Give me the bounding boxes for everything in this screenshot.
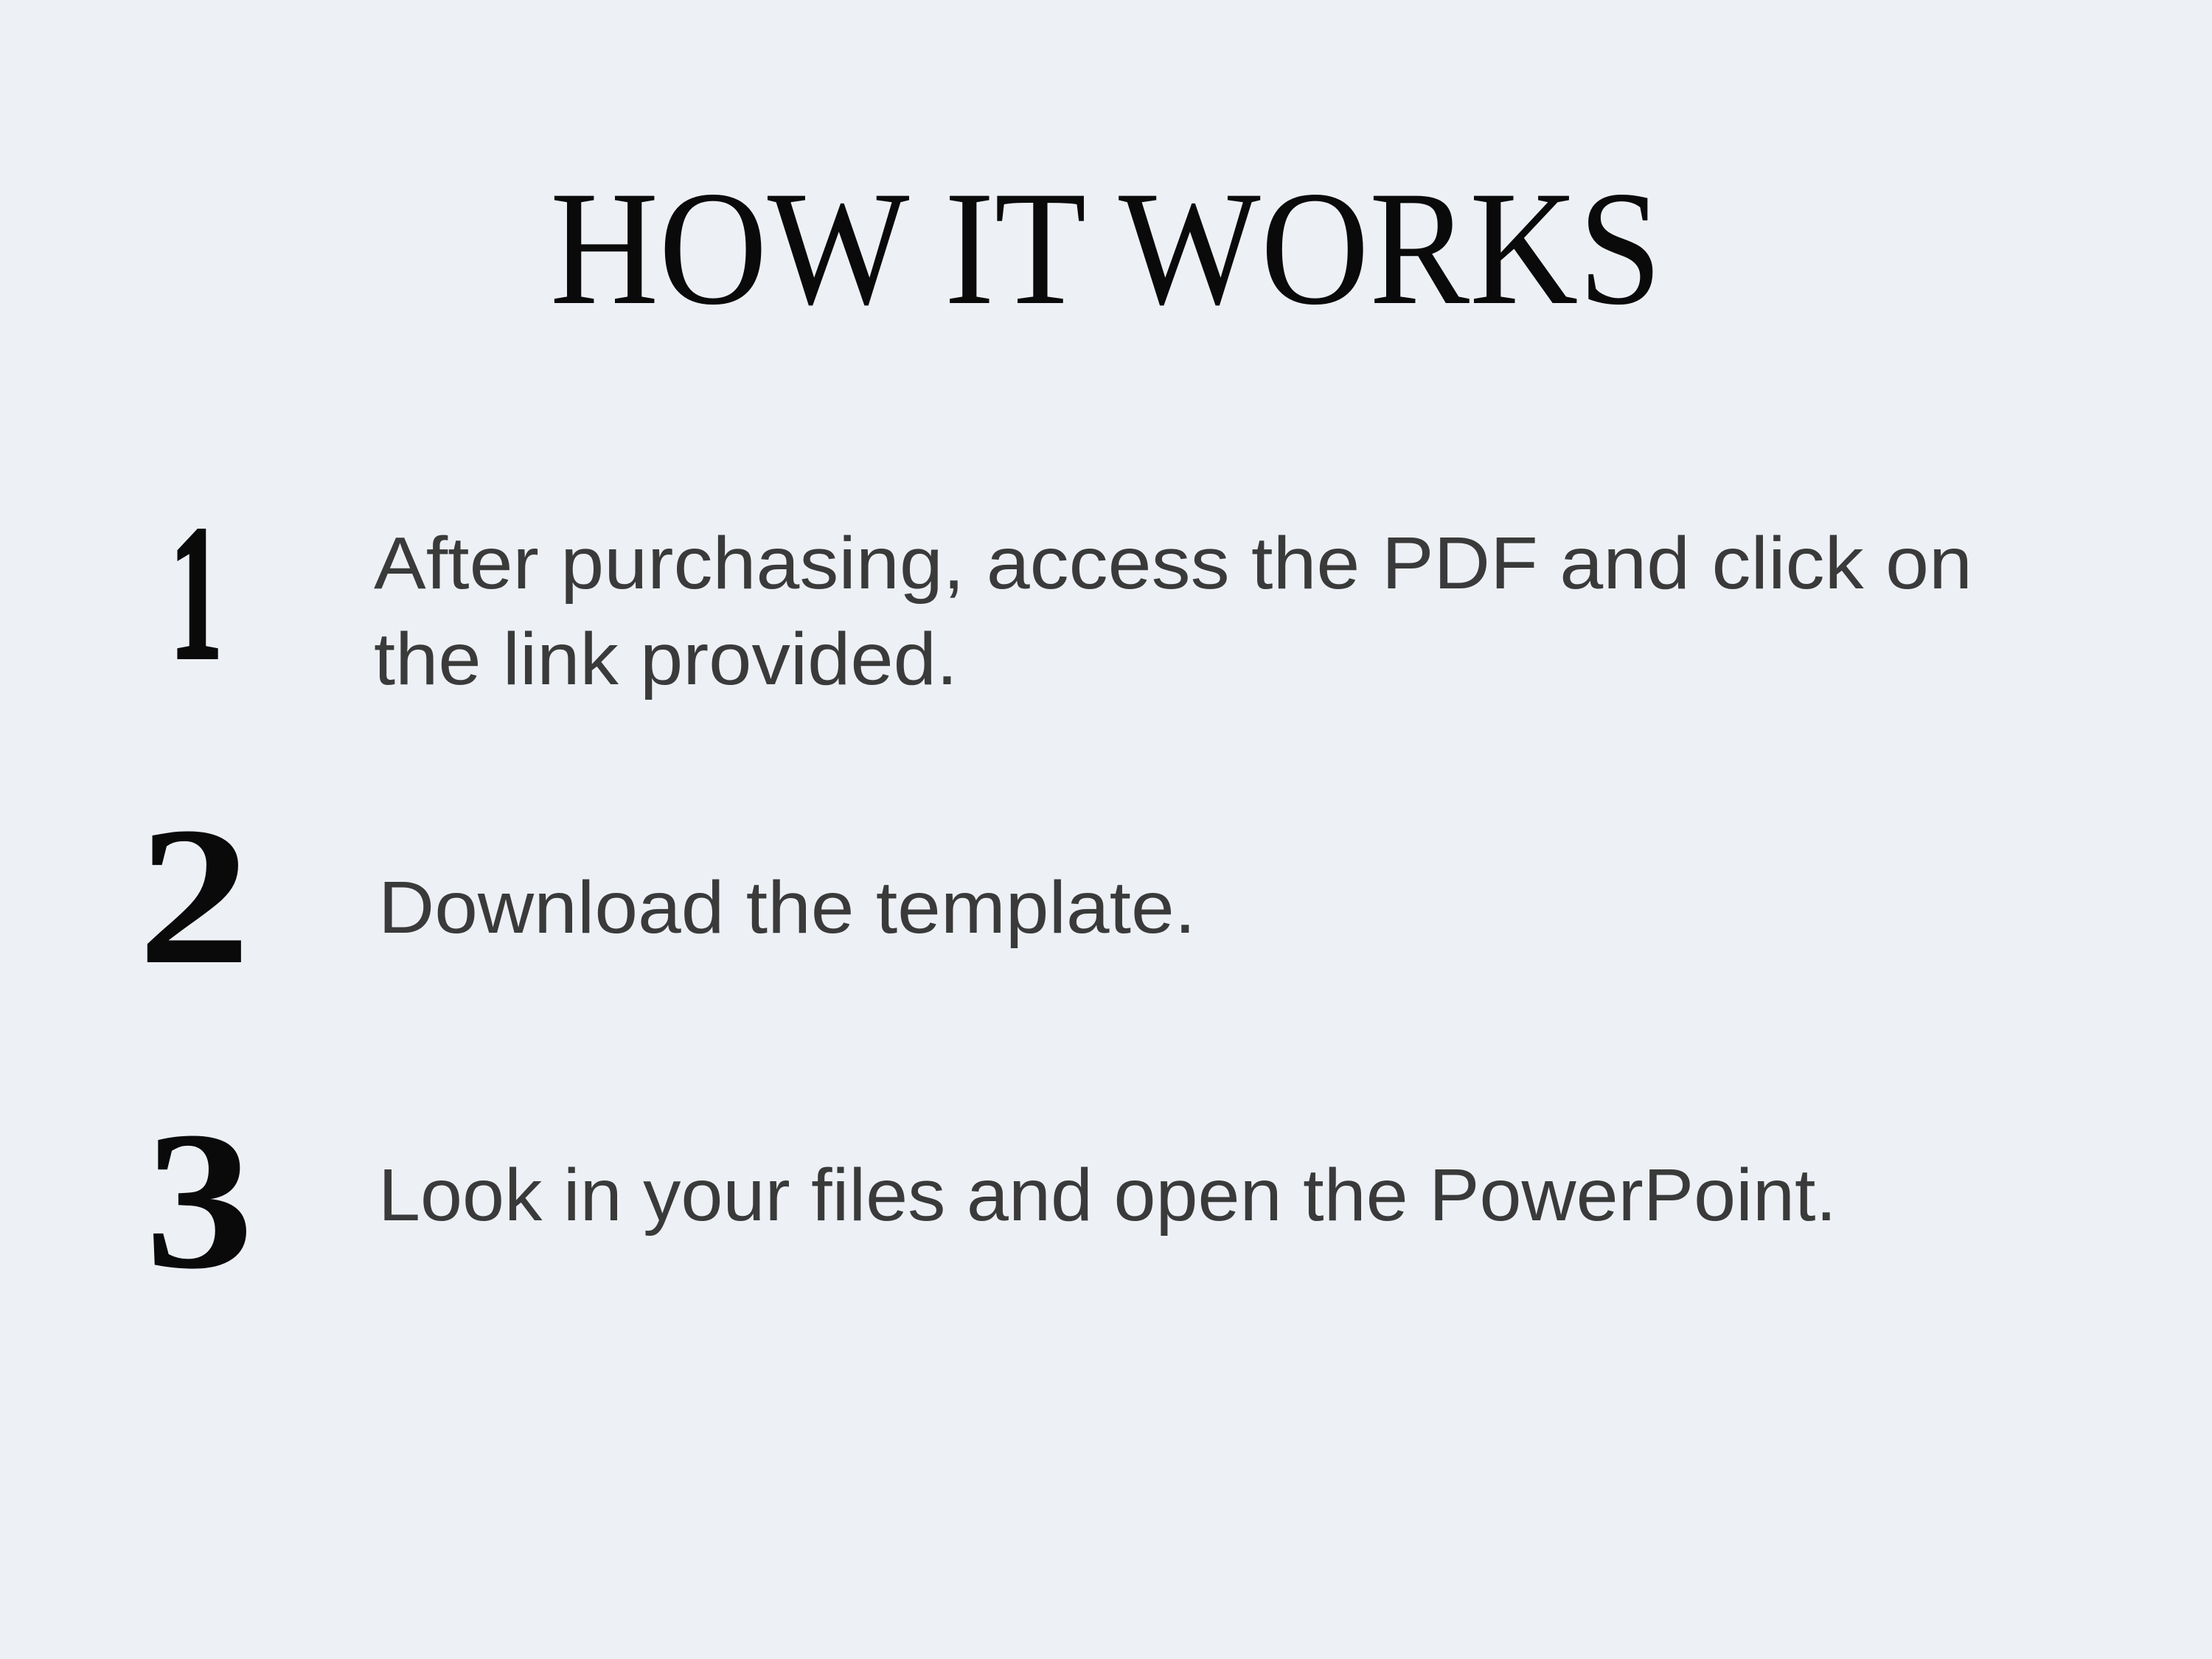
step 3 text: Look in your files and open the PowerPoint.	[378, 1154, 1837, 1237]
step 3	[145, 1091, 1837, 1310]
step 1 text: the link provided.	[374, 618, 958, 700]
title: HOW IT WORKS	[550, 158, 1662, 339]
number 2: 2	[138, 786, 251, 1005]
step 1 text	[374, 522, 1972, 700]
number 3: 3	[145, 1091, 254, 1310]
number 1: 1	[170, 486, 223, 700]
step 2 text: Download the template.	[378, 866, 1196, 949]
step 1 text: After purchasing, access the PDF and click on	[374, 522, 1972, 605]
step 1	[170, 486, 1972, 700]
step 2	[138, 786, 1196, 1005]
